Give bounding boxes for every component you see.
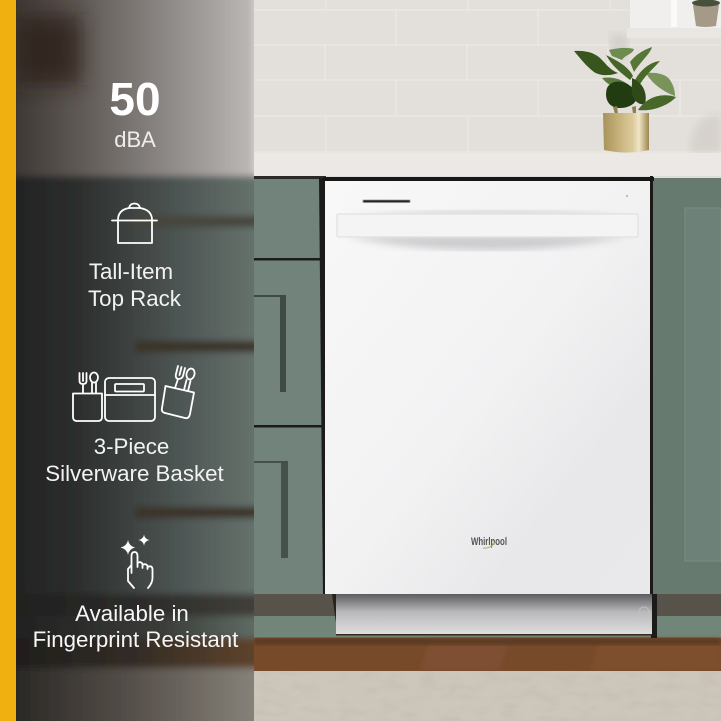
feature: silverware basket: 3-Piece [94,434,169,459]
icon: silverware basket [73,366,196,421]
blurred left panel [16,0,254,721]
feature: tall-item top rack: Top Rack [88,286,182,311]
kick plate [336,594,652,634]
vent slot [363,200,410,202]
feature: tall-item top rack: Tall-Item [89,259,173,284]
gold planter with plant [574,47,676,152]
feature: tall-item top rack [88,259,182,311]
upper cabinet [627,0,721,38]
brand logo: Whirlpool [471,536,507,548]
dishwasher [323,177,654,636]
feature: fingerprint resistant [33,601,239,652]
stat: 50 dBA [109,73,161,152]
feature: silverware basket: Silverware Basket [45,461,225,486]
handle shadow [345,236,630,250]
lower cabinets [254,176,721,596]
small plant on shelf [692,0,720,27]
right cup [162,386,194,418]
stat: 50 dBA: dBA [114,127,156,152]
indicator dot [626,195,628,197]
kitchen wall [254,0,721,155]
countertop [254,153,721,176]
yellow side bar [0,0,16,721]
feature: fingerprint resistant: Fingerprint Resistant [33,627,239,652]
door panel [325,181,650,594]
feature: fingerprint resistant: Available in [75,601,189,626]
icon: pot [112,204,157,243]
stat: 50 dBA: 50 [109,73,161,125]
toe kick and floor [254,594,721,671]
handle [337,214,638,237]
left cup [73,394,102,421]
icon: sparkles and hand [120,534,152,588]
feature: silverware basket [45,434,225,486]
center basket [105,378,155,421]
rug [254,671,721,721]
